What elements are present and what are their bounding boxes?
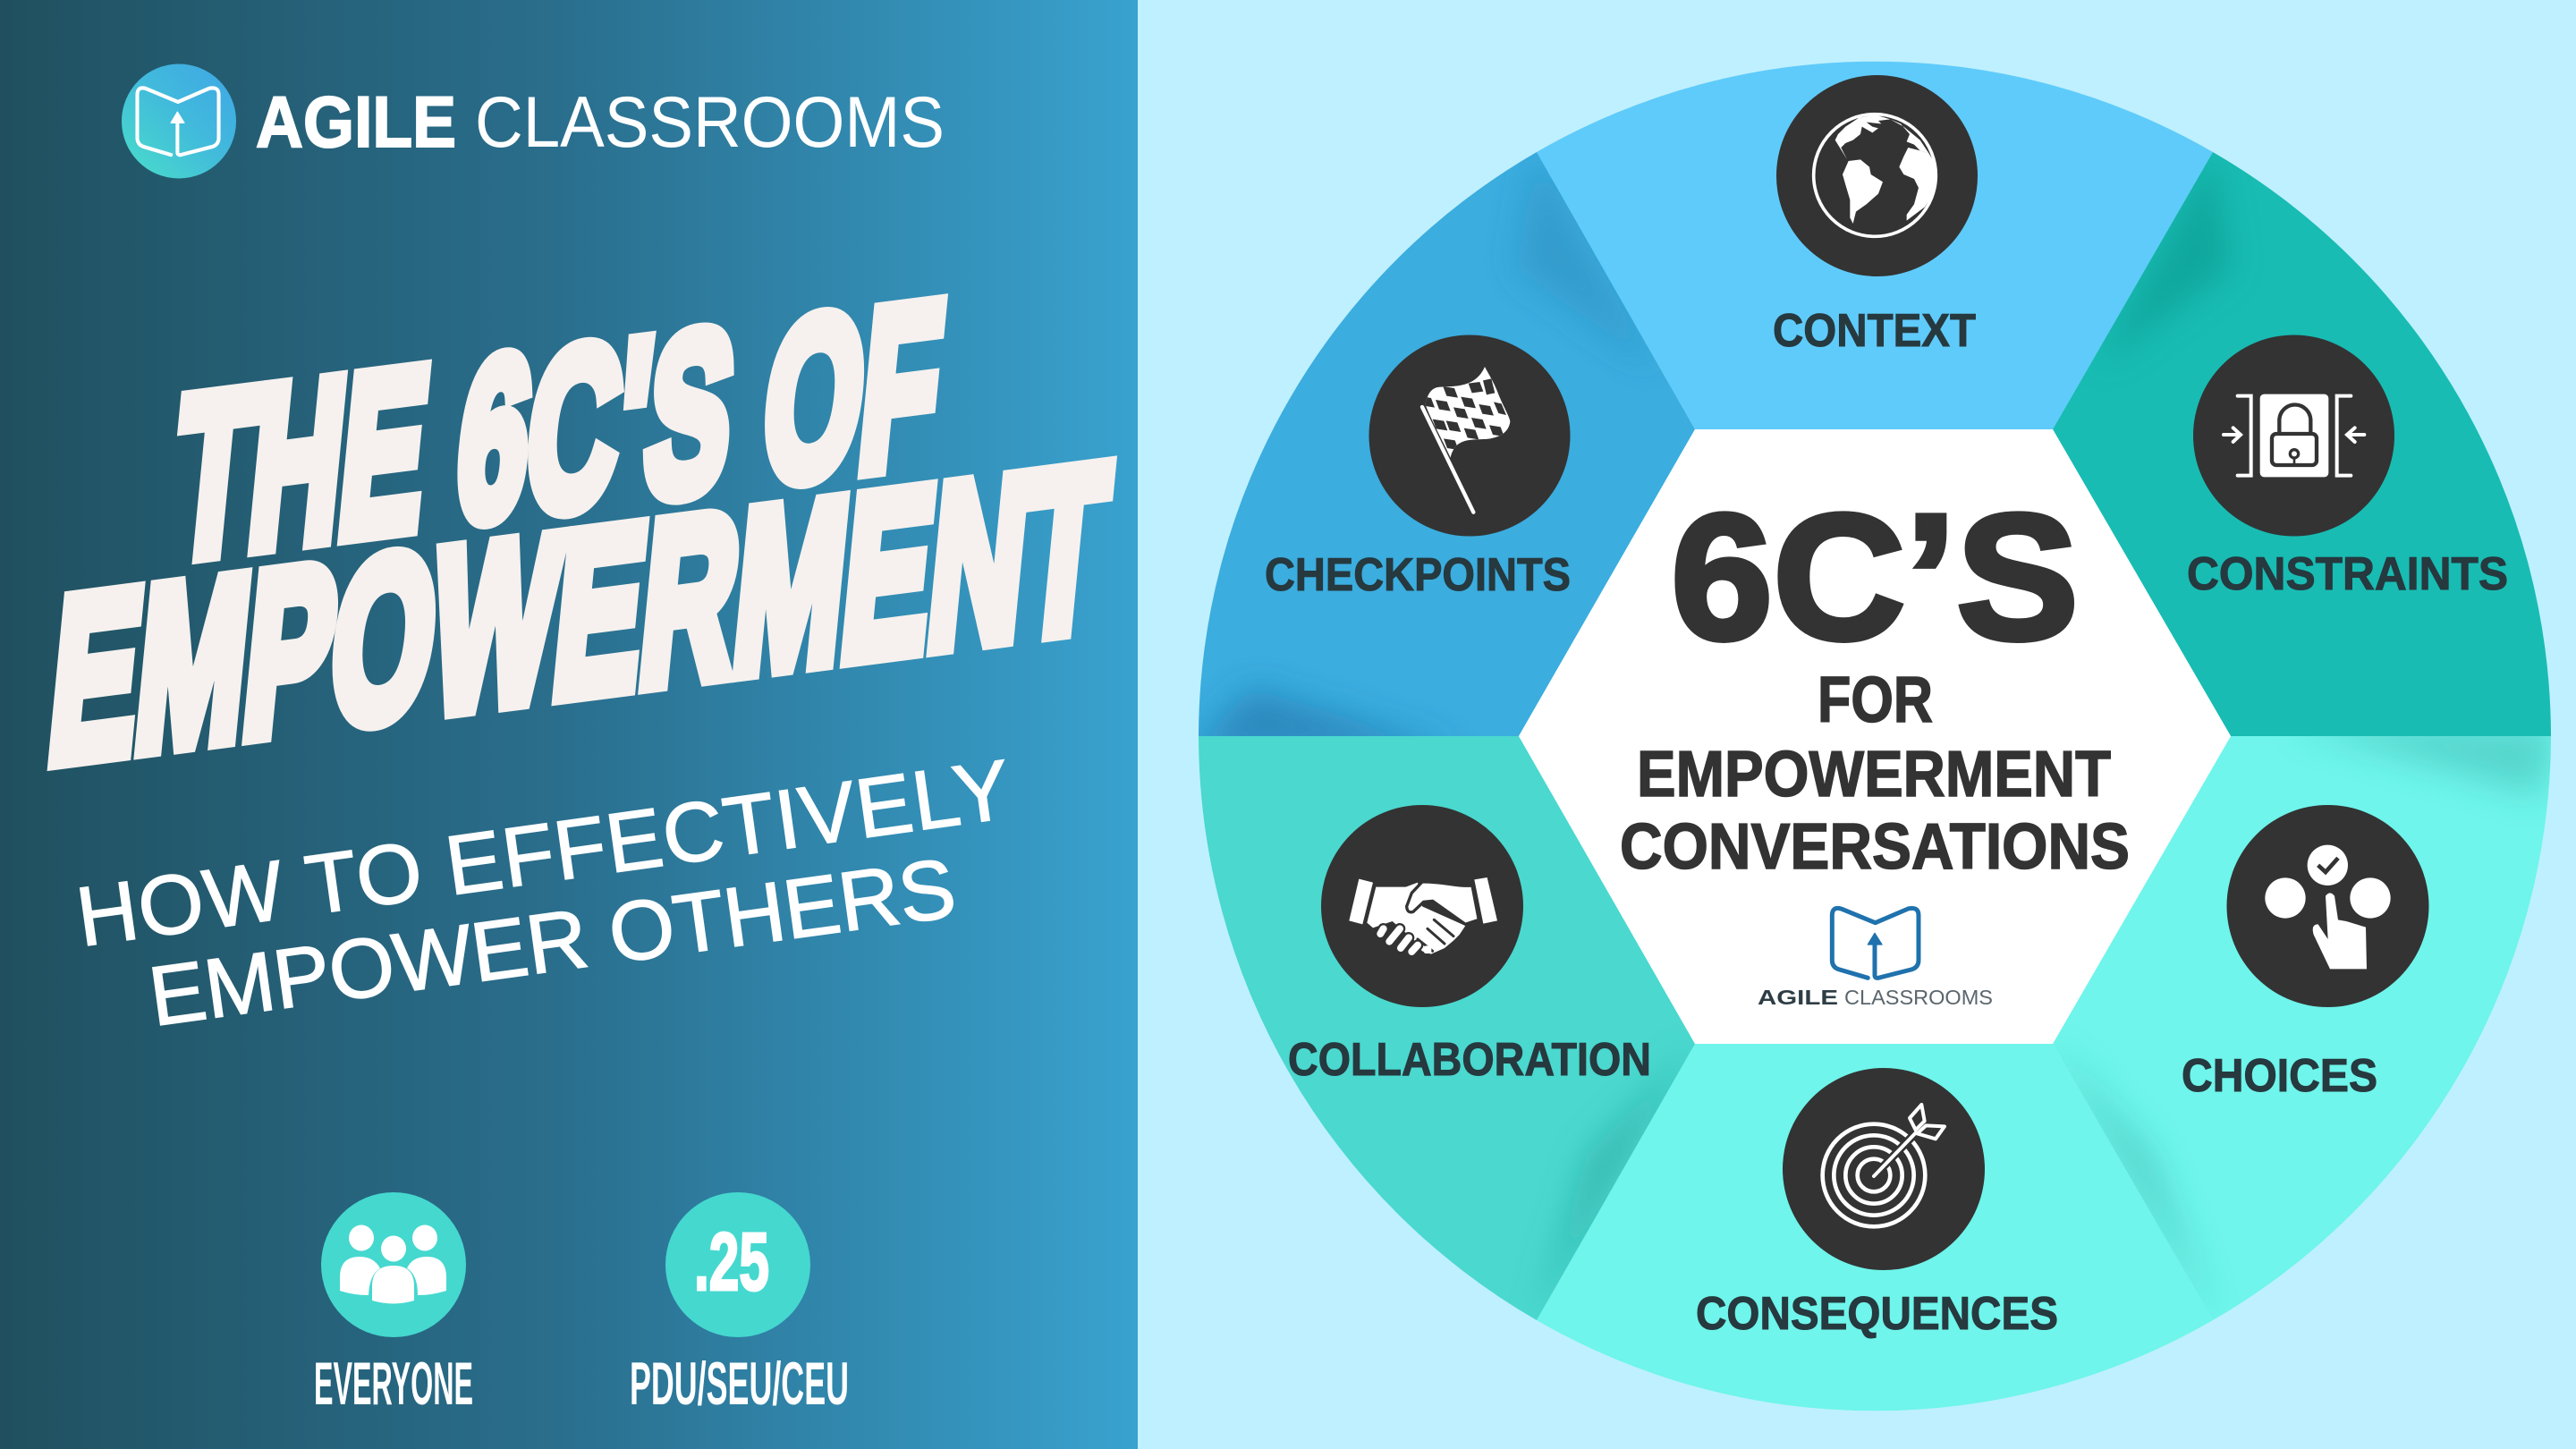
label: collaboration: COLLABORATION [1288,1034,1651,1086]
item: checkpoints [1265,335,1571,601]
centre subheading: EMPOWERMENT [1637,739,2111,810]
subtitle: HOW TO EFFECTIVELY [71,741,1016,964]
item: collaboration [1288,805,1651,1086]
item: context [1773,75,1978,357]
centre subheading: FOR [1818,665,1933,736]
brand logo [122,64,945,179]
brand logo: CLASSROOMS [475,82,945,163]
credit badge [630,1192,849,1418]
centre heading: 6C’S [1671,478,2079,677]
title [40,254,1117,811]
segment: context [1537,62,2213,429]
icon: globe [1814,114,1937,236]
icon: logo badge with book [122,64,236,179]
icon: hand selecting option [2265,845,2391,969]
title: THE 6C'S OF [165,254,952,606]
panel: left title panel: EVERYONE [314,1350,473,1418]
segment: choices [2053,724,2558,1320]
icon: .25 credit: .25 [694,1216,769,1308]
centre subheading [1620,665,2130,883]
centre logo: AGILE [1758,986,1838,1009]
segment: collaboration [1199,736,1695,1320]
label: constraints: CONSTRAINTS [2187,548,2508,600]
label: context: CONTEXT [1773,305,1976,357]
segment: constraints [2053,152,2551,736]
subtitle: EMPOWER OTHERS [143,841,961,1044]
label: consequences: CONSEQUENCES [1696,1288,2058,1340]
segment: consequences [1537,1044,2213,1411]
centre subheading: CONVERSATIONS [1620,811,2130,883]
icon: checkered flag [1422,367,1510,513]
item: constraints [2187,335,2508,600]
chart: 6Cs wheel [1190,62,2558,1411]
panel: left title panel [0,0,1138,1449]
segment: checkpoints [1190,152,1695,751]
icon: people [321,1192,466,1337]
icon: handshake [1349,877,1497,954]
icon: .25 credit [665,1192,810,1337]
centre logo [1758,908,1993,1009]
label: checkpoints: CHECKPOINTS [1265,549,1571,601]
label: choices: CHOICES [2182,1050,2377,1102]
label: credits: PDU/SEU/CEU [630,1350,849,1418]
centre hexagon [1519,429,2231,1044]
title: EMPOWERMENT [40,416,1117,811]
brand name: AGILE [256,82,456,163]
item: consequences [1696,1068,2058,1340]
icon: lock between brackets [2224,394,2364,477]
audience badge [314,1192,473,1418]
centre logo: CLASSROOMS [1844,986,1993,1009]
item: choices [2182,805,2429,1102]
icon: target and arrow [1823,1105,1945,1226]
